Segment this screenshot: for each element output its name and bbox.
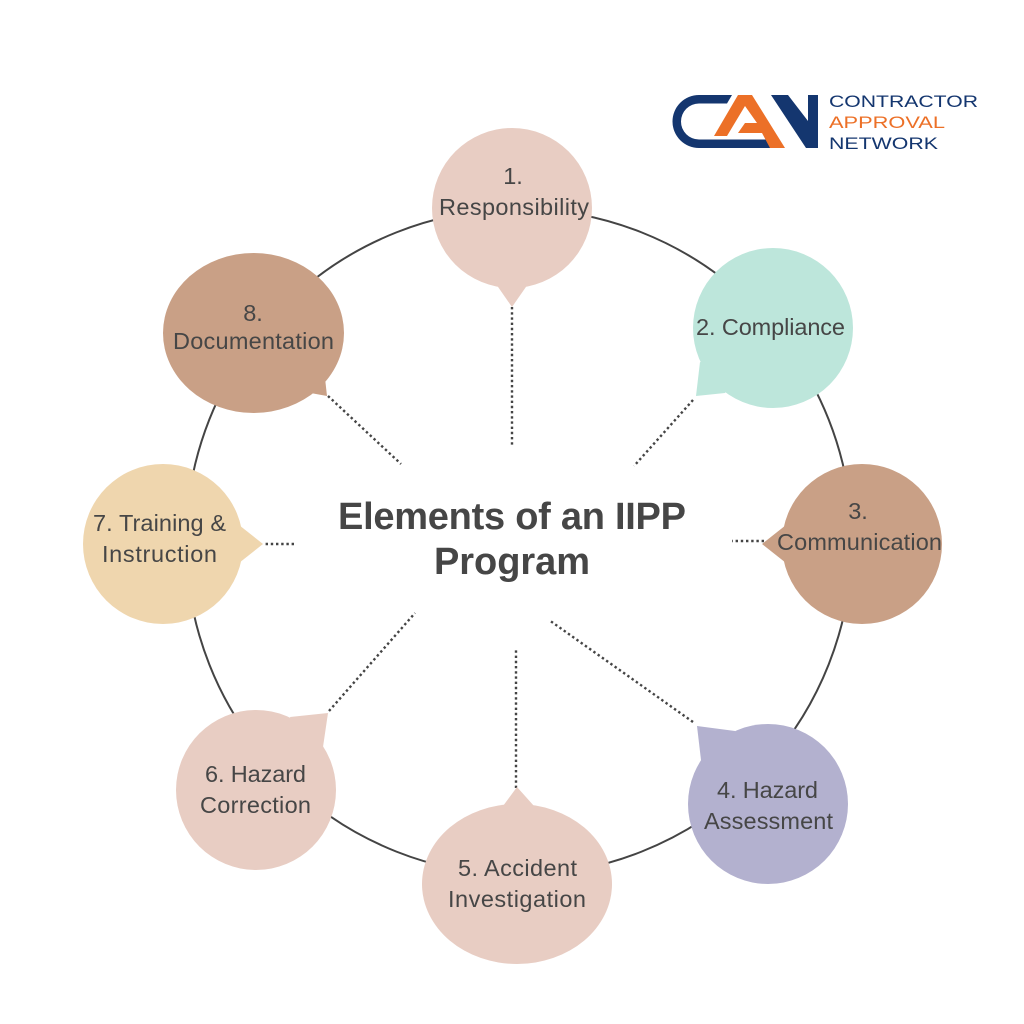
logo wordmark: CONTRACTOR [829, 92, 978, 111]
bubble 5: Accident Investigation [422, 787, 612, 964]
bubble 5: Accident Investigation: Investigation [448, 886, 586, 912]
dotted spokes [263, 307, 764, 788]
bubble 1: Responsibility [432, 128, 592, 307]
title: Program [434, 541, 590, 583]
bubble 7: Training & Instruction: 7. Training & [93, 510, 226, 536]
title: Elements of an IIPP [338, 496, 686, 538]
bubble 2: Compliance [693, 248, 853, 408]
logo: Contractor Approval Network [672, 92, 978, 153]
connecting ring [186, 209, 852, 875]
bubble 3: Communication: Communication [777, 529, 942, 555]
logo wordmark: APPROVAL [829, 113, 945, 132]
bubble 8: Documentation: Documentation [173, 328, 334, 354]
bubble 6: Hazard Correction: Correction [200, 792, 311, 818]
icon: CAN mark [672, 95, 818, 148]
bubble 4: Hazard Assessment [688, 724, 848, 884]
bubble 1: Responsibility: 1. [503, 163, 523, 189]
logo wordmark [829, 92, 978, 153]
bubble 6: Hazard Correction [176, 710, 336, 870]
bubble 2: Compliance: 2. Compliance [696, 314, 845, 340]
bubble 7: Training & Instruction: Instruction [102, 541, 217, 567]
bubble 4: Hazard Assessment: 4. Hazard [717, 777, 818, 803]
bubble 1: Responsibility: Responsibility [439, 194, 589, 220]
bubble 5: Accident Investigation: 5. Accident [458, 855, 577, 881]
bubble 7: Training & Instruction [83, 464, 263, 624]
bubble 4: Hazard Assessment: Assessment [704, 808, 833, 834]
title [338, 496, 686, 583]
logo wordmark: NETWORK [829, 134, 939, 153]
bubble 6: Hazard Correction: 6. Hazard [205, 761, 306, 787]
bubble 3: Communication [762, 464, 942, 624]
bubble 3: Communication: 3. [848, 498, 868, 524]
bubble 8: Documentation [163, 253, 344, 413]
bubble 8: Documentation: 8. [243, 300, 263, 326]
